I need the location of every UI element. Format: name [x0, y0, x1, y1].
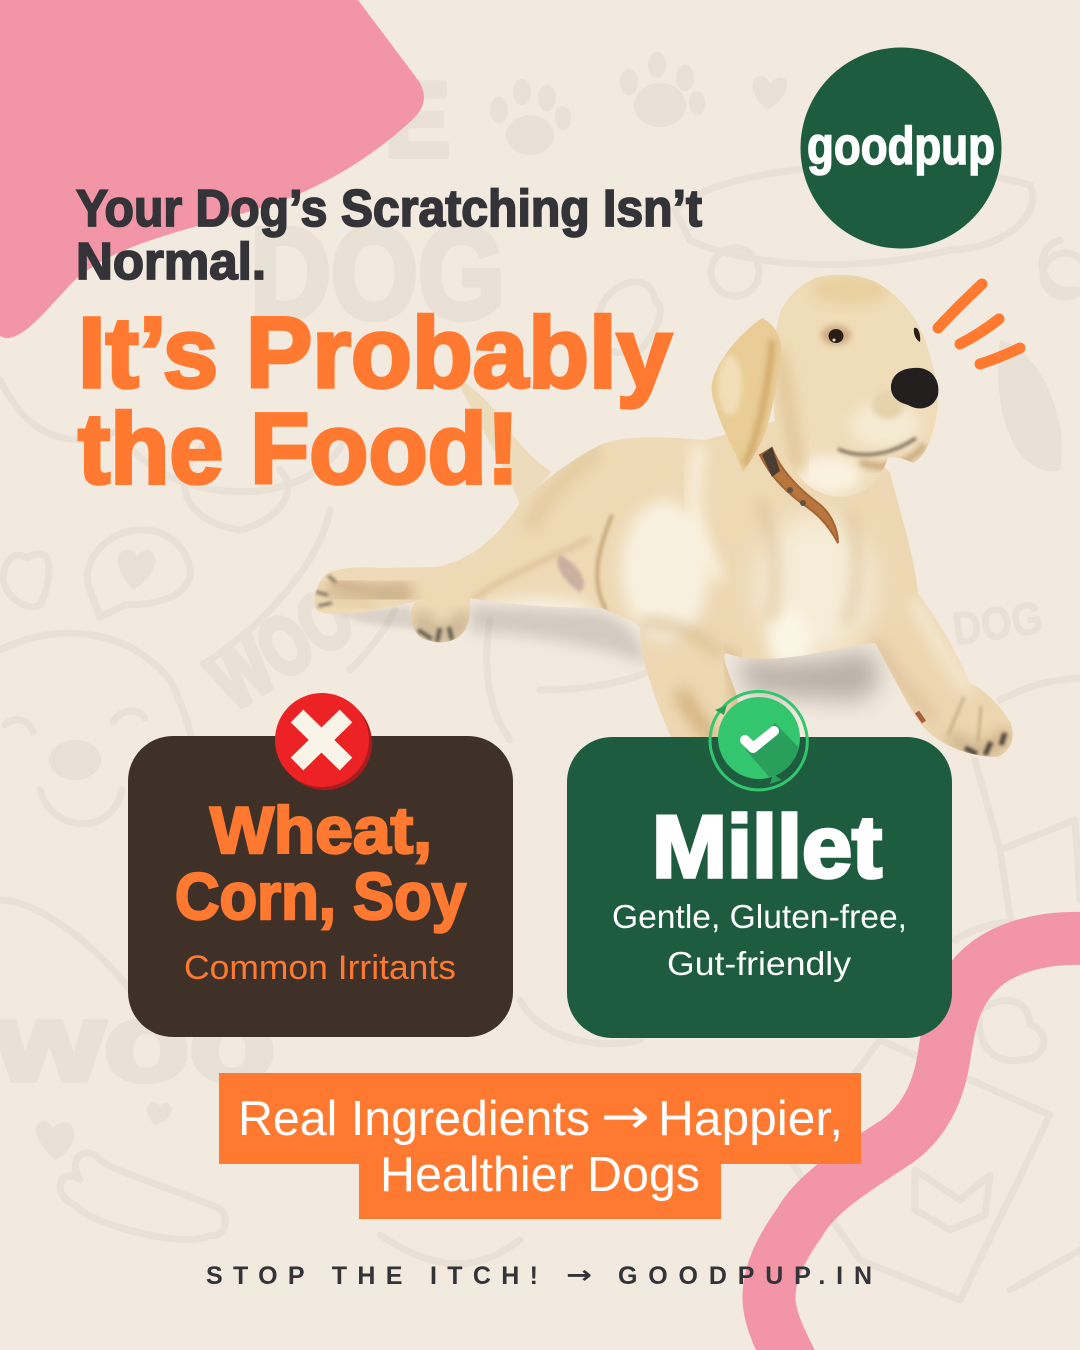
- doodle: large letters: [0, 62, 1046, 1104]
- dog tail: [456, 378, 552, 505]
- doodle: large letters: WOO: [193, 571, 369, 727]
- title: [76, 180, 702, 291]
- banner text: →: [601, 1088, 650, 1145]
- irritants heading: Corn, Soy: [175, 859, 466, 933]
- pink squiggle: [769, 938, 1080, 1350]
- headline: [78, 297, 672, 505]
- footer call to action: GOODPUP.IN: [618, 1262, 872, 1290]
- banner text: Healthier Dogs: [380, 1148, 700, 1202]
- irritants heading: [175, 793, 466, 933]
- irritants caption: Common Irritants: [184, 949, 456, 987]
- doodle: large letters: DOG: [949, 591, 1046, 655]
- headline: the Food!: [78, 393, 519, 505]
- pink blob top-left: [0, 0, 424, 338]
- dog head: [773, 275, 938, 497]
- dog body shading: [316, 445, 1008, 755]
- dog face shading: [778, 276, 925, 495]
- dog ear: [712, 318, 781, 472]
- orange sound marks: [938, 284, 1020, 364]
- banner text: [238, 1088, 843, 1202]
- dog nose: [891, 368, 938, 408]
- logo wordmark: goodpup: [807, 117, 995, 176]
- doodle: large letters: DOG: [250, 200, 505, 346]
- icon: green check: [710, 691, 807, 790]
- panel: irritants card: [128, 736, 513, 1037]
- millet caption: Gentle, Gluten-free,: [612, 898, 907, 935]
- dog collar: [760, 447, 838, 543]
- banner: [219, 1073, 861, 1219]
- headline: It’s Probably: [78, 297, 672, 409]
- title: Your Dog’s Scratching Isn’t: [76, 180, 702, 238]
- banner text: Real Ingredients: [238, 1092, 590, 1146]
- title: Normal.: [76, 233, 266, 291]
- footer call to action: STOP THE ITCH!: [206, 1262, 538, 1290]
- panel: millet card: [567, 737, 952, 1038]
- irritants heading: Wheat,: [210, 793, 432, 867]
- doodle: large letters: woo: [0, 981, 275, 1104]
- dog illustration: [314, 275, 1013, 757]
- icon: red cross: [275, 693, 372, 790]
- dog body: [314, 420, 1013, 757]
- footer call to action: →: [566, 1261, 592, 1289]
- banner text: Happier,: [658, 1092, 843, 1146]
- millet caption: Gut-friendly: [667, 945, 852, 982]
- logo badge: [800, 48, 1002, 248]
- millet caption: [612, 898, 907, 982]
- doodle: large letters: E: [385, 62, 450, 179]
- doodle: paw prints: [490, 52, 787, 155]
- dog ground shadow: [335, 605, 879, 700]
- millet heading: Millet: [652, 797, 882, 896]
- dog eyes: [828, 328, 920, 343]
- footer call to action: [206, 1261, 872, 1290]
- doodle: filled hearts and snout: [36, 340, 1062, 1160]
